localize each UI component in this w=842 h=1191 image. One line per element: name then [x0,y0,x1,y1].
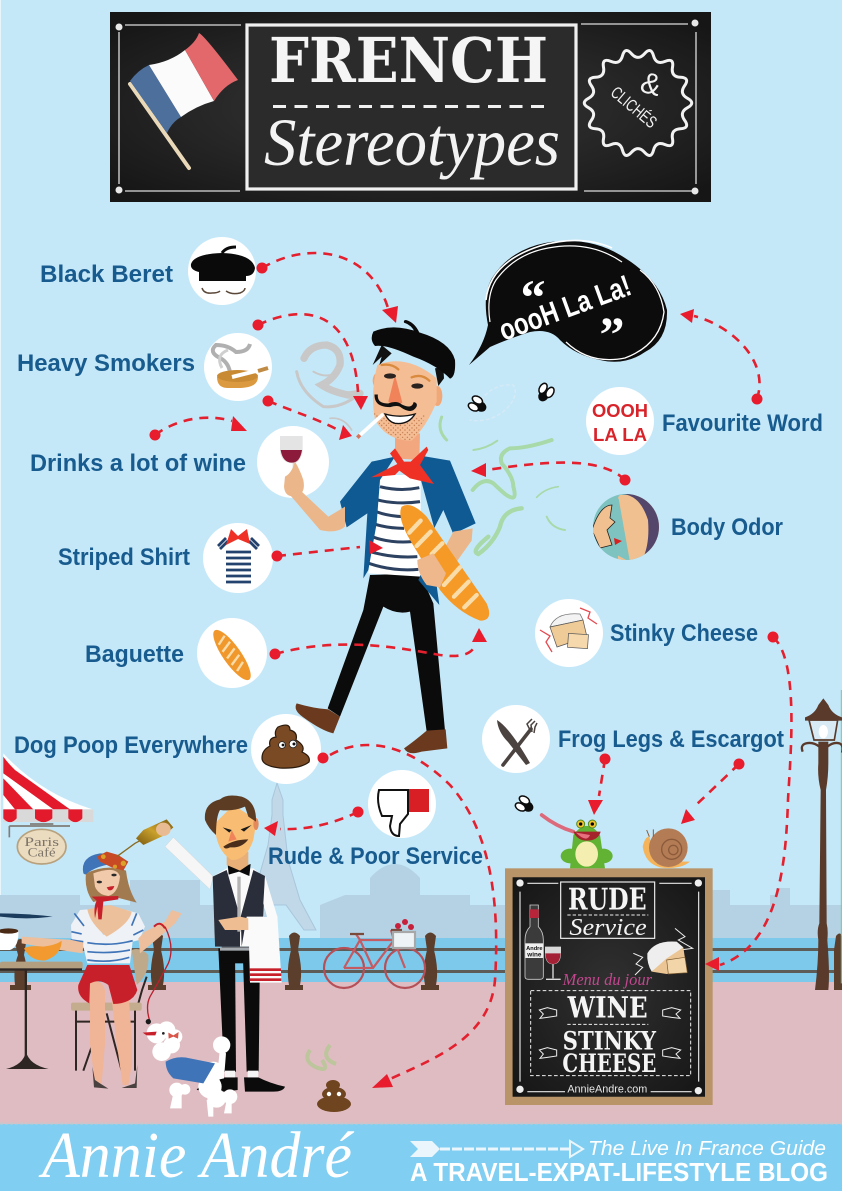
railing and balusters [0,932,842,990]
umbrella shadow [0,913,53,918]
arrow: shirt [272,540,383,562]
character: french man [280,320,489,753]
arrow: cigarette [262,396,352,440]
speech bubble: oooH La La! [495,269,636,348]
heading: French: FRENCH [269,24,548,97]
rude service box: Service [569,915,647,941]
waiter head [205,795,259,871]
oil bottle [117,819,173,857]
wine bottle and glass: Andre [526,946,543,952]
man jacket [340,455,476,605]
lamp post [802,690,842,990]
arrow: stinky cheese [705,632,791,971]
frog [542,815,613,868]
label: black beret: Black Beret [40,261,173,288]
heading: Stereotypes: Stereotypes [264,104,560,180]
chair [71,949,149,1071]
waiter torso [213,868,277,947]
man ears [373,373,442,406]
footer guide line: The Live In France Guide [588,1138,826,1160]
label: baguette: Baguette [85,641,184,668]
badge: and cliches [584,51,692,155]
stereotype labels [14,261,823,870]
header chalkboard banner [110,12,711,202]
cafe sign [9,824,70,864]
menu box [531,990,691,1078]
arrow: favourite word [680,309,762,404]
pavement [0,982,842,1124]
label: frog legs: Frog Legs & Escargot [558,726,784,753]
speech bubble [469,240,667,365]
speech bubble: ” [600,306,624,362]
label: heavy smokers: Heavy Smokers [17,350,195,377]
man neck [395,433,420,460]
icon: striped shirt [203,523,273,593]
man moustache [375,395,416,411]
badge: and cliches: & [637,66,665,103]
awning, cafe sign and seated scene [0,753,285,1117]
label: favourite word: Favourite Word [662,410,823,437]
woman top [71,905,145,963]
woman arms [22,910,182,953]
paris skyline [0,783,842,940]
icon: black beret [188,237,256,305]
dog leash [147,927,171,1022]
arrow: dog poop [318,745,496,1088]
waiter arm raised [165,837,213,889]
man legs [328,573,445,732]
cigarette [358,414,383,437]
waiter pants [218,947,260,1072]
arrow: body odor [471,463,630,486]
man hand on baguette [417,553,446,587]
icon: oooh la la: OOOH [592,401,648,421]
coffee cup [0,928,18,950]
cafe sign: Paris [24,835,59,849]
woman legs [90,981,132,1085]
frame [505,868,713,1105]
eiffel tower [238,783,316,930]
cafe sign: Café [28,846,56,860]
man smile [385,414,415,424]
croissant [24,941,62,961]
man head [373,361,437,441]
cigarette smoke [297,345,360,430]
man eyebrows [382,365,429,381]
wine bottle and glass: wine [526,951,542,958]
wine bottle and glass [525,905,561,979]
icon: french flag [130,33,238,168]
footer band [0,1119,842,1191]
cheese icon [633,928,693,975]
man shoes [296,703,447,753]
man hair [373,345,444,386]
icon: thumbs down [368,770,436,838]
waiter folded arm [218,917,248,930]
icon: stinky cheese [535,599,603,667]
arrow: rude service [264,806,364,836]
label: rude service: Rude & Poor Service [268,843,483,870]
man eyes [384,373,423,389]
arrow: smokers [252,314,368,410]
bicycle [324,919,425,988]
arrow: wine [150,416,247,440]
icon: oooh la la: LA LA [593,425,647,445]
man nose [388,375,402,405]
cafe table [0,962,83,1069]
menu box: CHEESE [562,1048,656,1078]
arrow: snail [681,758,744,824]
menu box: STINKY [563,1025,657,1055]
icon: knife and fork [482,705,550,773]
label: stinky cheese: Stinky Cheese [610,620,758,647]
rude service box [561,882,655,941]
arrow: baguette [270,628,487,660]
rude service box: RUDE [568,882,647,917]
man left arm and hand [290,490,345,531]
icon: woman smelling body odor [593,494,659,560]
woman head [83,852,137,919]
icon: baguette [197,618,267,688]
circle icons [188,237,665,838]
menu du jour: Menu du jour [562,970,652,989]
man right arm [437,528,473,573]
footer logo: Annie André [38,1119,355,1191]
label: dog poop: Dog Poop Everywhere [14,732,248,759]
label: striped shirt: Striped Shirt [58,544,190,571]
bow tie [228,864,251,876]
water [0,938,842,983]
baguette [400,505,489,621]
icon: oooh la la [586,387,654,455]
wine glass [280,436,304,496]
header frame [247,25,576,189]
arrow: frog [588,754,610,815]
towel [248,916,282,983]
chalkboard sign with frog and snail [505,815,713,1105]
woman skirt [78,965,137,1004]
poodle [143,1019,237,1117]
menu box: WINE [567,990,648,1024]
cafe awning [3,753,93,822]
poop on pavement [307,1045,351,1112]
footer arrow [410,1141,583,1157]
scarf [371,447,434,484]
icon: ashtray and smoke [204,333,272,401]
label: drinks wine: Drinks a lot of wine [30,450,246,477]
woman shoes [92,1065,137,1089]
icon: flies [467,382,556,816]
snail [643,828,690,868]
man shirt [368,475,421,577]
website credit: AnnieAndre.com [567,1084,647,1096]
speech bubble: “ [520,269,546,325]
stink lines [440,385,565,554]
dashed arrows [150,253,791,1088]
label: body odor: Body Odor [671,514,783,541]
man beard [372,412,425,440]
icon: wine circle [257,426,329,498]
beret [372,320,455,379]
badge: and cliches: CLICHÉS [607,83,660,132]
arrow: beret [256,253,398,323]
icon: dog poop [251,714,321,784]
waiter shoes [197,1077,285,1092]
